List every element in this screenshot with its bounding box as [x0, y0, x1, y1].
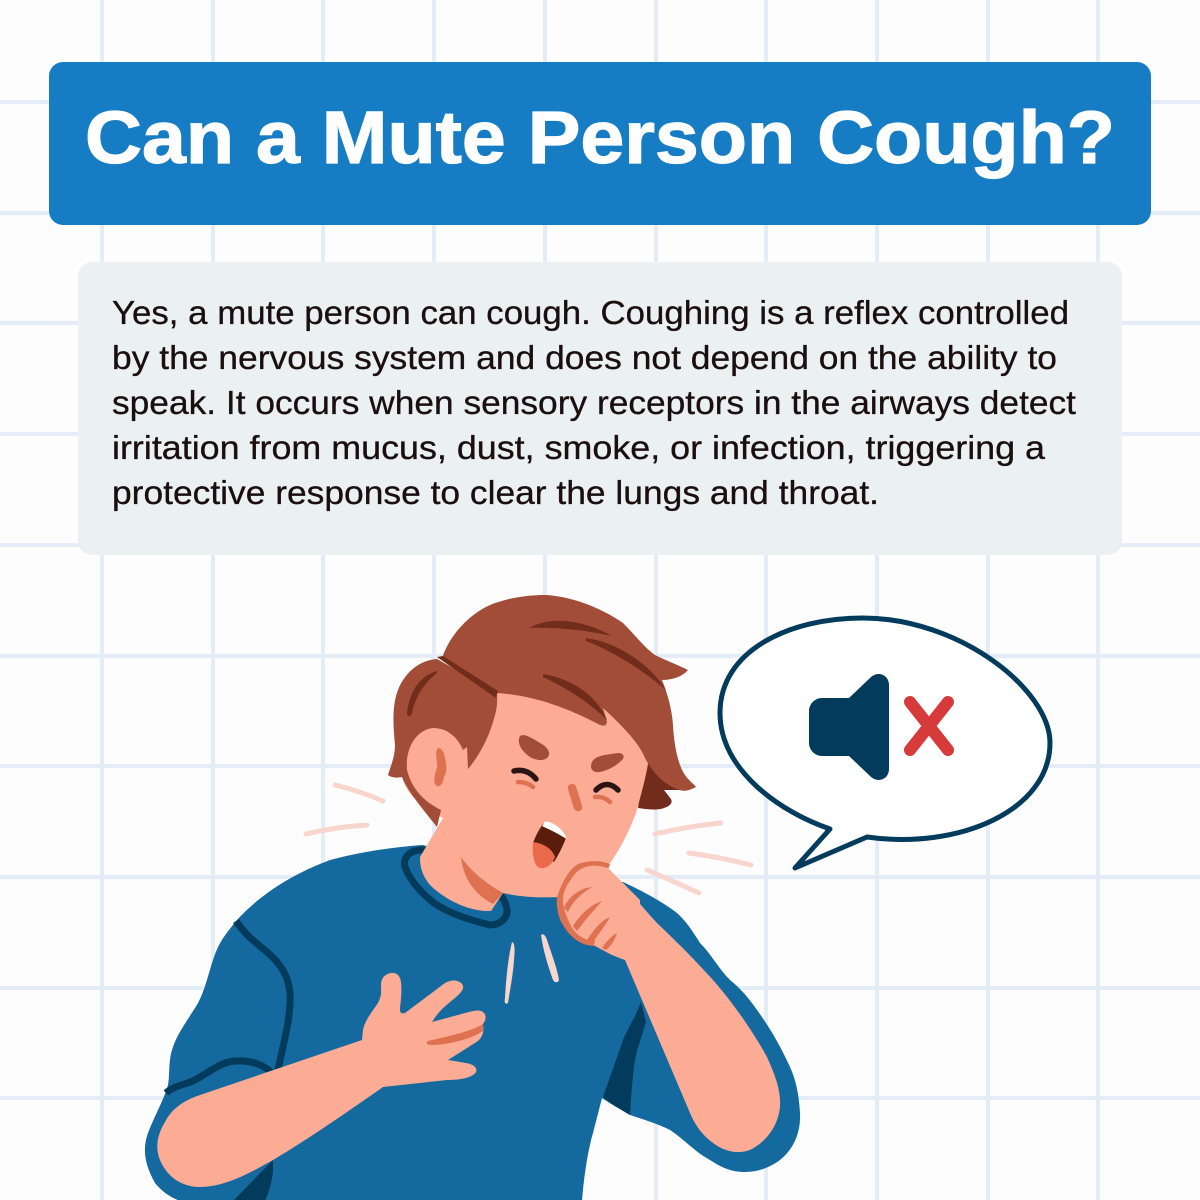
title: Can a Mute Person Cough?	[85, 96, 1115, 179]
cough motion lines	[306, 785, 751, 893]
fist skin	[563, 866, 640, 941]
nose	[572, 788, 578, 807]
text block: explanation	[112, 295, 1077, 512]
chest motion lines	[505, 934, 559, 1004]
text block: explanation: Yes, a mute person can cough. Coughing is a reflex controlled	[112, 295, 1069, 332]
title banner	[49, 62, 1151, 225]
icon: red x	[910, 702, 948, 750]
hair side	[388, 659, 497, 827]
inner ear	[434, 748, 446, 786]
eyes	[514, 770, 618, 790]
mouth	[533, 822, 566, 868]
fist outline	[557, 861, 610, 946]
back hair	[638, 758, 683, 810]
text block: explanation: speak. It occurs when sensory receptors in the airways detect	[112, 385, 1077, 422]
shirt shadow left	[233, 1160, 273, 1200]
text block: explanation: protective response to clear the lungs and throat.	[112, 475, 879, 512]
neck shadow	[461, 857, 503, 904]
face and neck	[400, 693, 650, 911]
panel: explanation	[78, 262, 1122, 555]
icon: speaker	[809, 674, 889, 780]
palm crease	[427, 1024, 483, 1045]
left arm and hand	[157, 973, 486, 1187]
neck collar line	[404, 850, 507, 925]
hair	[388, 595, 696, 827]
text block: explanation: irritation from mucus, dust, smoke, or infection, triggering a	[112, 430, 1045, 467]
right arm and fist	[557, 861, 780, 1152]
illustration: coughing person	[145, 595, 800, 1200]
finger creases	[564, 887, 617, 950]
speech bubble with muted speaker	[720, 618, 1050, 868]
sleeve seams	[166, 921, 290, 1093]
under-eye marks	[518, 782, 610, 802]
hair strands	[407, 621, 666, 720]
shirt	[145, 845, 800, 1200]
text block: explanation: by the nervous system and does not depend on the ability to	[112, 340, 1057, 377]
eyebrows	[519, 735, 624, 772]
shirt shadow right	[603, 1002, 646, 1115]
hair top	[442, 595, 696, 791]
